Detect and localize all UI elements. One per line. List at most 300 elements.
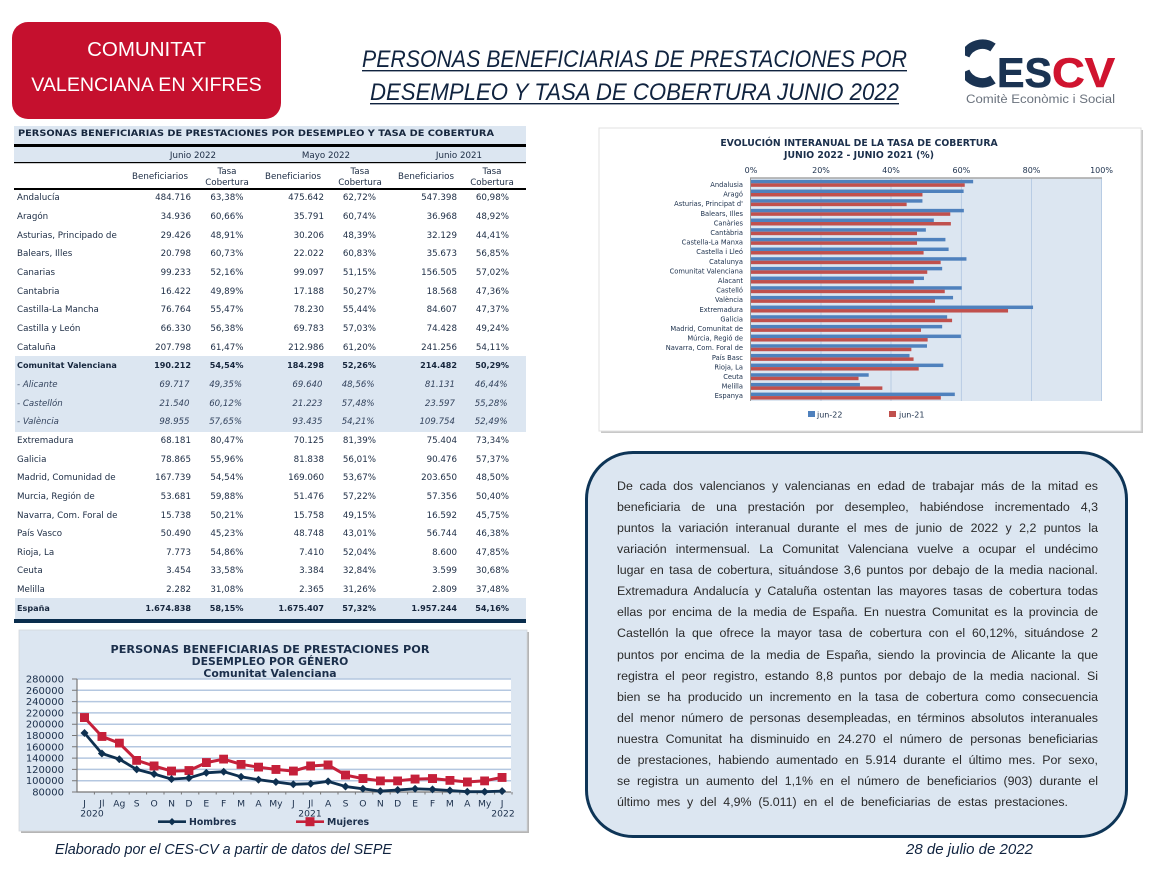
text panel: commentary (585, 451, 1128, 838)
row: Extremadura: 68.181 (161, 436, 191, 446)
row: Murcia (17, 491, 509, 502)
region labels: Madrid, Comunitat de (670, 325, 743, 333)
region labels: Melilla (722, 383, 743, 391)
row: Comunitat Valenciana: 50,29% (475, 360, 509, 370)
row: Navarra: Navarra, Com. Foral de (17, 511, 117, 521)
row: Canarias: 99.233 (161, 268, 191, 278)
region labels: València (715, 296, 743, 304)
row: Melilla: Melilla (17, 585, 45, 595)
row: Balears: 20.798 (161, 249, 191, 259)
x axis labels: J (291, 798, 295, 810)
row: Aragón: Aragón (17, 211, 48, 222)
row: Asturias (17, 231, 509, 241)
row: Castilla-La Mancha: 55,47% (210, 305, 244, 315)
row: Cataluña: Cataluña (17, 343, 56, 353)
row: Murcia: 51.476 (294, 492, 324, 502)
row: Aragón: 35.791 (294, 212, 324, 222)
row: Murcia: 59,88% (210, 492, 244, 502)
x axis labels: J (82, 798, 86, 810)
table header: Cobertura (205, 178, 249, 188)
row: País Vasco: 46,38% (476, 529, 509, 539)
row: Extremadura: 73,34% (476, 436, 509, 446)
x axis labels: F (430, 798, 435, 810)
region labels: Espanya (715, 392, 743, 400)
x axis labels: N (168, 798, 175, 810)
row: Alicante: 69.717 (159, 380, 190, 390)
commentary text: variación intermensual. La Comunitat Valenciana vuelve a ocupar el undécimo (617, 542, 1098, 556)
bar chart panel: coverage rate evolution (599, 128, 1143, 433)
table header: Beneficiarios (398, 172, 454, 182)
table header: Tasa (216, 167, 237, 177)
row: Castilla-La Mancha: 47,37% (476, 305, 509, 315)
row: Castilla y León: 66.330 (161, 324, 191, 334)
row: Balears: 35.673 (427, 249, 457, 259)
y axis labels: 140000 (26, 754, 64, 765)
series: jun-21 bars (751, 183, 1008, 400)
row: Navarra: 50,21% (210, 511, 244, 521)
row: Galicia: 55,96% (210, 455, 244, 465)
row: Balears: 60,73% (210, 249, 244, 259)
row: España: 54,16% (475, 603, 509, 613)
row: Castellón: 21.223 (292, 399, 322, 409)
x axis labels: M (237, 798, 245, 810)
row: Navarra (17, 511, 509, 521)
line chart legend: Hombres (189, 817, 237, 828)
row: Castilla-La Mancha: 76.764 (161, 305, 191, 315)
logo: CES-CV: CV (1052, 49, 1115, 96)
row: Comunitat Valenciana: 184.298 (287, 360, 324, 370)
row: Castellón: 21.540 (159, 399, 190, 409)
row: Andalucía: 60,98% (476, 193, 509, 203)
x axis labels: E (412, 798, 418, 810)
row: Cataluña (17, 343, 509, 353)
row: Canarias: 51,15% (343, 268, 376, 278)
row: Melilla: 2.809 (432, 585, 457, 595)
row: Ceuta: 32,84% (343, 566, 376, 576)
row: Cataluña: 61,20% (343, 343, 376, 353)
y axis labels: 180000 (26, 731, 64, 742)
line chart title (110, 643, 430, 680)
row: Andalucía: 63,38% (210, 193, 244, 203)
row: Canarias (17, 268, 509, 278)
row: Castilla-La Mancha: Castilla-La Mancha (17, 305, 99, 315)
region labels (666, 181, 744, 400)
y axis labels: 120000 (26, 765, 64, 776)
row: Melilla: 31,26% (343, 585, 376, 595)
region labels: Asturias, Principat d' (674, 200, 743, 208)
row: Galicia: 78.865 (161, 455, 191, 465)
row: Galicia: 56,01% (343, 455, 376, 465)
row: València (17, 416, 508, 427)
badge: Comunitat Valenciana en xifres: VALENCIANA EN XIFRES (31, 74, 262, 96)
row: Castilla-La Mancha: 84.607 (427, 305, 457, 315)
row: País Vasco: 56.744 (427, 529, 457, 539)
table title band (14, 126, 526, 147)
highlight bands (14, 356, 526, 623)
row: Melilla: 2.365 (299, 585, 324, 595)
row: Cantabria: 18.568 (427, 287, 457, 297)
row: Melilla: 31,08% (210, 585, 244, 595)
row: Rioja (17, 548, 509, 558)
y axis labels: 200000 (26, 720, 64, 731)
commentary text: del menor número de personas desempleadas, en términos absolutos interanuales (617, 711, 1098, 725)
region labels: Canàries (714, 219, 744, 227)
row: País Vasco: País Vasco (17, 529, 62, 539)
x axis labels: A (325, 798, 332, 810)
badge: Comunitat Valenciana en xifres (12, 22, 281, 119)
row: Canarias: 156.505 (421, 268, 457, 278)
x axis labels: N (377, 798, 384, 810)
row: Cantabria: 16.422 (161, 287, 191, 297)
row: Galicia: 90.476 (427, 455, 457, 465)
commentary text: puntos por encima de la media de España, siendo la provincia de Alicante la que (617, 648, 1098, 662)
row: Aragón (17, 211, 509, 222)
row: Cataluña: 61,47% (210, 343, 244, 353)
commentary text (617, 479, 1098, 809)
table header: Junio 2022 (169, 151, 216, 161)
row: Navarra: 15.738 (161, 511, 191, 521)
row: València: - València (17, 416, 59, 427)
region labels: Castelló (716, 287, 743, 295)
row: Alicante: 49,35% (209, 380, 242, 390)
main title (362, 46, 907, 106)
commentary text: De cada dos valencianos y valencianas en edad de trabajar más de la mitad es (617, 479, 1098, 493)
row: País Vasco: 50.490 (161, 529, 191, 539)
row: Navarra: 49,15% (343, 511, 376, 521)
row: Comunitat Valenciana: 54,54% (210, 360, 244, 370)
x axis labels (80, 798, 515, 820)
row: Cantabria: 47,36% (476, 287, 509, 297)
row: Castilla y León: 57,03% (343, 324, 376, 334)
row: Murcia: 53.681 (161, 492, 191, 502)
row: Asturias: 30.206 (294, 231, 324, 241)
series: Mujeres (84, 718, 502, 782)
x axis labels: 2022 (491, 808, 515, 820)
row: Rioja: 8.600 (432, 548, 457, 558)
row: Comunitat Valenciana: 190.212 (154, 360, 191, 370)
row: Andalucía: 484.716 (155, 193, 191, 203)
y axis labels: 260000 (26, 686, 64, 697)
series: Hombres (84, 733, 502, 792)
row: Castilla-La Mancha (17, 305, 509, 315)
row: Ceuta: 3.454 (166, 566, 191, 576)
row: Navarra: 45,75% (476, 511, 509, 521)
row: València: 98.955 (159, 417, 190, 427)
row: Canarias: 57,02% (476, 268, 509, 278)
row: Andalucía: Andalucía (17, 193, 60, 203)
logo: CES-CV (965, 44, 1115, 106)
line chart title: PERSONAS BENEFICIARIAS DE PRESTACIONES POR (110, 643, 430, 656)
line chart legend (158, 817, 370, 828)
date: 28 de julio de 2022 (905, 842, 1033, 858)
x axis labels: E (203, 798, 209, 810)
row: Comunitat Valenciana: 52,26% (342, 360, 376, 370)
row: Castellón: 55,28% (475, 399, 508, 409)
row: Melilla: 37,48% (476, 585, 509, 595)
commentary text: puntos la variación interanual durante el mes de junio de 2022 y 2,2 puntos la (617, 521, 1098, 535)
row: Andalucía: 62,72% (343, 193, 376, 203)
row: Aragón: 36.968 (427, 212, 457, 222)
region labels: Catalunya (709, 258, 743, 266)
series: jun-22 bars (751, 180, 1033, 396)
row: Extremadura: 70.125 (294, 436, 324, 446)
x axis labels: Ag (113, 798, 125, 810)
x axis labels: 2021 (298, 808, 322, 820)
row: España: 1.674.838 (145, 603, 191, 613)
row: Rioja: 52,04% (343, 548, 376, 558)
row: Alicante: - Alicante (17, 380, 58, 390)
row: Asturias: 32.129 (427, 231, 457, 241)
region labels: Comunitat Valenciana (670, 267, 743, 275)
x axis labels: 2020 (80, 808, 104, 820)
row: Asturias: 48,91% (210, 231, 244, 241)
row: Balears: 60,83% (343, 249, 376, 259)
table header: Tasa (481, 167, 502, 177)
row: Ceuta: Ceuta (17, 566, 43, 576)
region labels: Ceuta (723, 373, 743, 381)
line chart legend: Mujeres (327, 817, 370, 828)
region labels: Alacant (718, 277, 743, 285)
row: Comunitat Valenciana: Comunitat Valenciana (17, 360, 117, 370)
row: País Vasco: 48.748 (294, 529, 324, 539)
logo: CES-CV: Comitè Econòmic i Social (966, 94, 1115, 106)
bar chart legend: jun-21 (898, 410, 924, 420)
region labels: Balears, Illes (700, 210, 744, 218)
row: Castilla y León: 74.428 (427, 324, 457, 334)
row: Madrid: Madrid, Comunidad de (17, 473, 116, 483)
table header: Cobertura (470, 178, 514, 188)
row: Canarias: Canarias (17, 268, 56, 278)
row: Ceuta: 3.599 (432, 566, 457, 576)
y axis labels (26, 674, 64, 798)
row: Cantabria (17, 287, 509, 297)
row: Madrid: 167.739 (155, 473, 191, 483)
logo: CES-CV: ES (997, 49, 1052, 96)
row: Castellón: - Castellón (17, 398, 63, 409)
line chart title: Comunitat Valenciana (203, 667, 337, 680)
x axis labels: My (478, 798, 492, 810)
x axis labels: F (221, 798, 226, 810)
table header: Mayo 2022 (302, 151, 350, 161)
line chart title: DESEMPLEO POR GÉNERO (192, 655, 348, 668)
row: Rioja: 47,85% (476, 548, 509, 558)
row: Galicia: 57,37% (476, 455, 509, 465)
row: Asturias: Asturias, Principado de (17, 231, 117, 241)
x axis labels: A (255, 798, 262, 810)
row: Cataluña: 207.798 (155, 343, 191, 353)
table title band: PERSONAS BENEFICIARIAS DE PRESTACIONES POR DESEMPLEO Y TASA DE COBERTURA (18, 129, 494, 139)
row: Castilla y León: Castilla y León (17, 323, 80, 334)
row: Galicia: Galicia (17, 455, 46, 465)
row: Extremadura: Extremadura (17, 436, 73, 446)
row: Aragón: 60,66% (210, 212, 244, 222)
table header: Beneficiarios (132, 172, 188, 182)
table header: Cobertura (338, 178, 382, 188)
row: València: 52,49% (475, 417, 508, 427)
row: Cantabria: 50,27% (343, 287, 376, 297)
row: Cantabria: Cantabria (17, 287, 59, 297)
row: Asturias: 44,41% (476, 231, 509, 241)
row: Canarias: 52,16% (210, 268, 244, 278)
row: Cantabria: 49,89% (210, 287, 244, 297)
y axis labels: 80000 (32, 788, 64, 798)
x axis labels: Jl (98, 798, 105, 810)
x axis labels: O (150, 798, 158, 810)
main title: PERSONAS BENEFICIARIAS DE PRESTACIONES POR (362, 46, 907, 73)
row: Alicante (17, 380, 508, 390)
row: Alicante: 46,44% (475, 380, 508, 390)
row: Castilla y León (17, 323, 509, 334)
row: Rioja: 7.410 (299, 548, 324, 558)
percent axis labels: 100% (1090, 166, 1113, 175)
row: Cantabria: 17.188 (294, 287, 324, 297)
row: Cataluña: 54,11% (476, 343, 509, 353)
x axis labels: J (500, 798, 503, 810)
row: España (17, 603, 509, 613)
row: España: 58,15% (210, 603, 244, 613)
commentary text: ellas por encima de la media de España. En nuestra Comunitat es la provincia de (617, 605, 1098, 619)
percent axis labels: 80% (1023, 166, 1041, 175)
row: Extremadura (17, 436, 509, 446)
x axis labels: A (464, 798, 471, 810)
row: Castilla y León: 49,24% (476, 324, 509, 334)
row: Comunitat Valenciana (17, 360, 509, 370)
commentary text: Extremadura Andalucía y Cataluña ostentan las mayores tasas de cobertura todas (617, 584, 1098, 598)
row: València: 57,65% (209, 417, 242, 427)
commentary text: último mes y del 4,9% (5.011) en el de beneficiarias de estas prestaciones. (617, 795, 1068, 809)
row: Balears: Balears, Illes (17, 249, 73, 259)
row: Ceuta: 33,58% (210, 566, 244, 576)
row: Rioja: 7.773 (166, 548, 191, 558)
bar chart title: EVOLUCIÓN INTERANUAL DE LA TASA DE COBERTURA (720, 137, 998, 149)
x axis labels: M (446, 798, 454, 810)
percent axis labels: 0% (745, 166, 758, 175)
y axis labels: 280000 (26, 674, 64, 686)
y axis labels: 100000 (26, 776, 64, 787)
row: Balears: 22.022 (294, 249, 324, 259)
row: Murcia: 50,40% (476, 492, 509, 502)
row: Alicante: 81.131 (425, 380, 455, 390)
row: Asturias: 29.426 (161, 231, 191, 241)
x axis labels: My (269, 798, 283, 810)
row: Ceuta (17, 566, 509, 576)
percent axis labels (745, 166, 1113, 175)
row: Madrid: 48,50% (476, 473, 509, 483)
row: Madrid (17, 473, 509, 483)
row: Murcia: Murcia, Región de (17, 491, 95, 502)
row: España: 1.675.407 (278, 603, 324, 613)
row: España: España (17, 603, 50, 613)
row: Rioja: 54,86% (210, 548, 244, 558)
row: Melilla: 2.282 (166, 585, 191, 595)
row: Ceuta: 30,68% (476, 566, 509, 576)
row: Cataluña: 241.256 (421, 343, 457, 353)
x axis labels: D (394, 798, 401, 810)
main title: DESEMPLEO Y TASA DE COBERTURA JUNIO 2022 (370, 79, 899, 106)
row: Ceuta: 3.384 (299, 566, 324, 576)
table header: Tasa (349, 167, 370, 177)
commentary text: de prestaciones, habiendo aumentado en 5.914 durante el último mes. Por sexo, (617, 753, 1098, 767)
row: Cataluña: 212.986 (288, 343, 324, 353)
row: València: 109.754 (419, 417, 455, 427)
region labels: Cantàbria (710, 229, 743, 237)
row: Murcia: 57.356 (427, 492, 457, 502)
region labels: Galicia (720, 315, 743, 323)
bar chart title: JUNIO 2022 - JUNIO 2021 (%) (783, 150, 934, 161)
row: Castellón: 57,48% (342, 399, 374, 409)
commentary text: nuestra Comunitat ha disminuido en 24.270 el número de personas beneficiarias (617, 732, 1098, 746)
x axis labels: D (185, 798, 192, 810)
commentary text: se registra un aumento del 1,1% en el número de beneficiarios (903) durante el (617, 774, 1098, 788)
row: Castilla y León: 69.783 (294, 324, 324, 334)
commentary text: registra el peor registro, estando 8,8 puntos por debajo de la media nacional. Si (617, 669, 1098, 683)
row: Navarra: 16.592 (427, 511, 457, 521)
percent axis labels: 60% (953, 166, 971, 175)
percent axis labels: 20% (812, 166, 830, 175)
row: País Vasco (17, 529, 509, 539)
row: País Vasco: 43,01% (343, 529, 376, 539)
line chart panel: beneficiaries by gender (19, 630, 529, 833)
row: Extremadura: 80,47% (210, 436, 244, 446)
row: València: 93.435 (292, 417, 322, 427)
row: Castilla-La Mancha: 78.230 (294, 305, 324, 315)
region labels: Castella-La Manxa (682, 239, 743, 247)
x axis labels: Jl (307, 798, 313, 810)
row: País Vasco: 45,23% (210, 529, 244, 539)
row: Alicante: 48,56% (342, 380, 374, 390)
percent axis labels: 40% (882, 166, 900, 175)
table: beneficiaries and coverage rate (14, 126, 526, 623)
table header: Beneficiarios (265, 172, 321, 182)
row: Andalucía: 547.398 (421, 193, 457, 203)
row: Aragón: 60,74% (343, 212, 376, 222)
row: Asturias: 48,39% (343, 231, 376, 241)
commentary text: beneficiaria de una prestación por desempleo, habiéndose incrementado 4,3 (617, 500, 1098, 514)
commentary text: bien se ha producido un incremento en la tasa de cobertura como consecuencia (617, 690, 1098, 704)
x axis labels: O (359, 798, 367, 810)
row: Andalucía (17, 193, 509, 203)
row: Rioja: Rioja, La (17, 548, 54, 558)
row: València: 54,21% (342, 417, 374, 427)
row: Extremadura: 81,39% (343, 436, 376, 446)
row: Madrid: 169.060 (288, 473, 324, 483)
x axis labels: S (343, 798, 349, 810)
row: Andalucía: 475.642 (288, 193, 324, 203)
commentary text: Castellón la que ofrece la mayor tasa de cobertura con el 60,12%, situándose 2 (617, 626, 1098, 640)
region labels: Andalusia (710, 181, 743, 189)
row: Madrid: 53,67% (343, 473, 376, 483)
row: Melilla (17, 585, 509, 595)
row: Balears: 56,85% (476, 249, 509, 259)
region labels: Rioja, La (714, 363, 743, 371)
bar chart title (720, 137, 998, 161)
bar chart legend: jun-22 (816, 410, 842, 420)
region labels: Múrcia, Regió de (687, 335, 743, 343)
region labels: Extremadura (700, 306, 743, 314)
row: Canarias: 99.097 (294, 268, 324, 278)
row: Madrid: 54,54% (210, 473, 244, 483)
row: Castellón (17, 398, 508, 409)
row: Extremadura: 75.404 (427, 436, 457, 446)
row: Aragón: 48,92% (476, 212, 509, 222)
row: Galicia: 81.838 (294, 455, 324, 465)
row: Comunitat Valenciana: 214.482 (420, 360, 457, 370)
row: España: 57,32% (342, 603, 376, 613)
row: Castilla y León: 56,38% (210, 324, 244, 334)
y axis labels: 220000 (26, 708, 64, 719)
row: Castellón: 23.597 (425, 399, 456, 409)
row: Aragón: 34.936 (161, 212, 191, 222)
